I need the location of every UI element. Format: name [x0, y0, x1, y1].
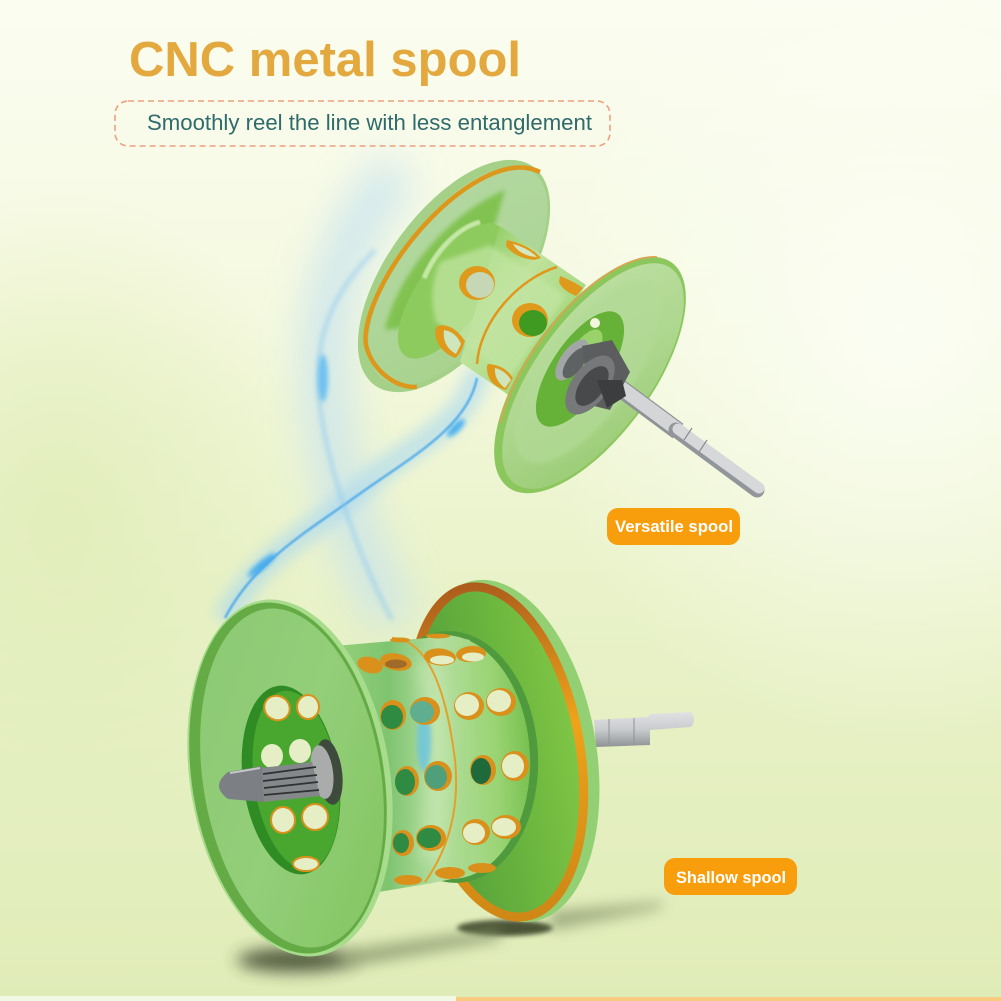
blue light ribbon	[225, 170, 478, 620]
shadow under shallow spool	[237, 902, 662, 972]
barrel	[335, 627, 544, 897]
back flange	[383, 565, 625, 937]
back flange	[320, 127, 588, 425]
versatile spool illustration	[320, 127, 759, 524]
subtitle callout	[115, 101, 610, 146]
rear shaft	[594, 712, 694, 747]
front flange	[458, 226, 722, 524]
pinion shaft	[219, 738, 346, 806]
label: versatile spool: Versatile spool	[615, 518, 733, 536]
barrel holes	[435, 240, 583, 390]
label: versatile spool	[607, 508, 740, 545]
front flange	[163, 585, 417, 971]
label: shallow spool	[664, 858, 797, 895]
shallow spool illustration	[163, 565, 694, 971]
barrel	[378, 207, 586, 396]
barrel holes	[355, 634, 529, 885]
subtitle callout: Smoothly reel the line with less entanglement	[147, 110, 592, 135]
label: shallow spool: Shallow spool	[676, 869, 786, 887]
shaft and bearing	[549, 334, 759, 490]
title: CNC metal spool	[129, 33, 521, 87]
flange holes	[260, 691, 328, 871]
